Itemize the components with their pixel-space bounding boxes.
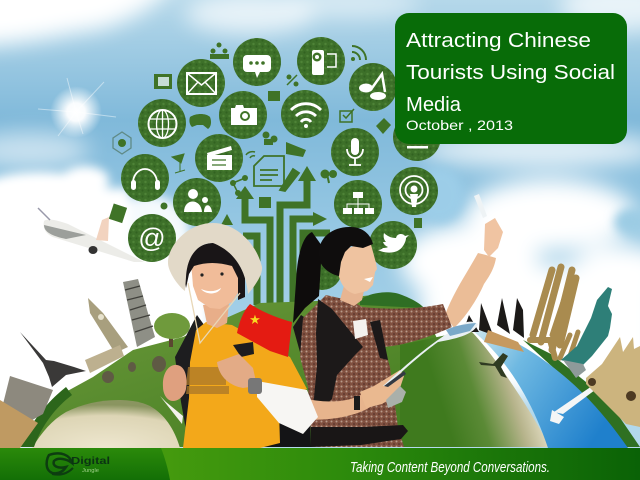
hat strap: [188, 283, 240, 343]
hedge right: [523, 340, 640, 447]
icon: stamp: [109, 204, 127, 223]
icon: award: [414, 218, 422, 228]
ground: hills, beach and sea: [20, 292, 640, 448]
shoulder strap: [370, 320, 388, 360]
person: boy tourist with flag: [160, 223, 318, 448]
icon: rss: [351, 46, 366, 61]
small icons around the tree: [109, 42, 422, 228]
arrows: growth tree trunk: [243, 180, 330, 305]
icon: sun flare: [38, 78, 116, 138]
icon: small folder: [259, 197, 271, 208]
icon: film camera: [262, 132, 278, 145]
sea: [472, 330, 628, 448]
icon: small tag: [376, 118, 391, 134]
icon: at sign: @: [138, 223, 166, 253]
icon: percent: [286, 74, 298, 86]
icon: microphone: [331, 128, 379, 176]
belt: [311, 425, 408, 447]
icon: music note: [349, 63, 397, 111]
yellow shirt: [183, 322, 307, 448]
logo: Digital Jungle: Digital: [71, 455, 110, 467]
panel: title: [395, 13, 627, 144]
icon: web target: [113, 132, 131, 154]
footer band: [0, 448, 640, 480]
hill left: [20, 295, 470, 447]
hedge edge: [20, 387, 72, 447]
landmark: Pisa tower: [123, 279, 155, 347]
logo: Digital Jungle: [47, 453, 110, 475]
icon: at sign: [128, 214, 176, 262]
grazing animals: [102, 356, 166, 383]
title text: Media: [406, 94, 462, 116]
footer dark left section: [0, 448, 170, 480]
raised arm: [445, 253, 496, 328]
grass and beach right: [400, 330, 550, 447]
icon: gear: [160, 202, 168, 210]
sailing boat: [550, 386, 595, 424]
icon: video camera: [297, 37, 345, 85]
landmark: Sagrada Familia: [530, 267, 578, 362]
airplane: [38, 208, 144, 262]
icon: tree: [154, 313, 190, 347]
backpack strap: [313, 299, 363, 409]
backpack lower: [255, 405, 311, 447]
face: [336, 241, 377, 294]
social media icon tree: [109, 37, 441, 305]
blouse: [300, 295, 452, 447]
title text: Attracting Chinese: [406, 30, 591, 52]
icon: globe: [138, 99, 186, 147]
white sleeve right: [257, 381, 318, 434]
hand left: [163, 365, 187, 401]
icon: photo camera: [219, 91, 267, 139]
icon: tablet behind title panel: [393, 113, 441, 161]
icon: small wifi: [246, 152, 255, 158]
icon: clapperboard: [195, 134, 243, 182]
flag: [237, 304, 292, 357]
landmark: old buildings: [0, 376, 53, 448]
icon: photos: [154, 74, 172, 89]
landmark: Big Ben: [85, 298, 128, 373]
icon: community group: [210, 42, 229, 59]
icon: gift: [268, 91, 280, 101]
white sleeve left: [160, 396, 183, 424]
icon: chat bubble: [233, 38, 281, 86]
icon: document with pen: [254, 156, 299, 191]
title text: Tourists Using Social: [406, 62, 615, 84]
backpack left: [293, 315, 307, 363]
hand right: [217, 354, 257, 388]
icon: megaphone: [286, 142, 306, 157]
person: girl tourist with map: [293, 194, 503, 447]
map: [383, 322, 478, 386]
small island tree: [479, 353, 508, 378]
icon: envelope: [177, 59, 225, 107]
landmarks right: [463, 267, 640, 427]
icon: game controller: [189, 114, 211, 129]
camera bottle: [386, 386, 406, 408]
hair: [185, 243, 245, 300]
neck: [340, 282, 365, 306]
bush on hill: [360, 292, 424, 308]
icon: check box: [340, 109, 354, 122]
icon: headphones: [121, 154, 169, 202]
icon: circle behind girl: [302, 250, 342, 290]
white collar: [353, 319, 368, 339]
dark strap near flag: [233, 342, 254, 357]
hair: [319, 227, 373, 276]
icon: cocktail: [172, 154, 185, 173]
lower arm: [303, 391, 373, 420]
ponytail: [293, 232, 322, 323]
landmark: opera house: [463, 298, 524, 352]
sandy path: [32, 400, 180, 448]
left strap: [175, 315, 207, 447]
icon: share nodes: [230, 175, 248, 196]
icon: clouds tree: [320, 170, 337, 183]
landmarks left: [0, 279, 190, 448]
person: boy tourist with flag: ★: [249, 312, 261, 327]
tagline: Taking Content Beyond Conversations.: [350, 459, 550, 476]
icon: people: [173, 178, 221, 226]
icon: podcast: [390, 167, 438, 215]
date text: October , 2013: [406, 117, 513, 133]
landmark: Eiffel tower: [20, 332, 86, 387]
face: [191, 262, 240, 309]
title text: [406, 30, 615, 116]
neck: [203, 303, 229, 328]
icon: org chart: [334, 180, 382, 228]
landmark: cathedral: [586, 337, 640, 427]
phone: [474, 194, 487, 218]
landmark: Statue of Liberty: [561, 287, 612, 378]
icon: wifi: [281, 90, 329, 138]
icon: twitter bird: [369, 221, 417, 269]
arrow heads: [221, 166, 327, 226]
hat: [168, 223, 262, 294]
logo: Digital Jungle: Jungle: [82, 468, 99, 474]
